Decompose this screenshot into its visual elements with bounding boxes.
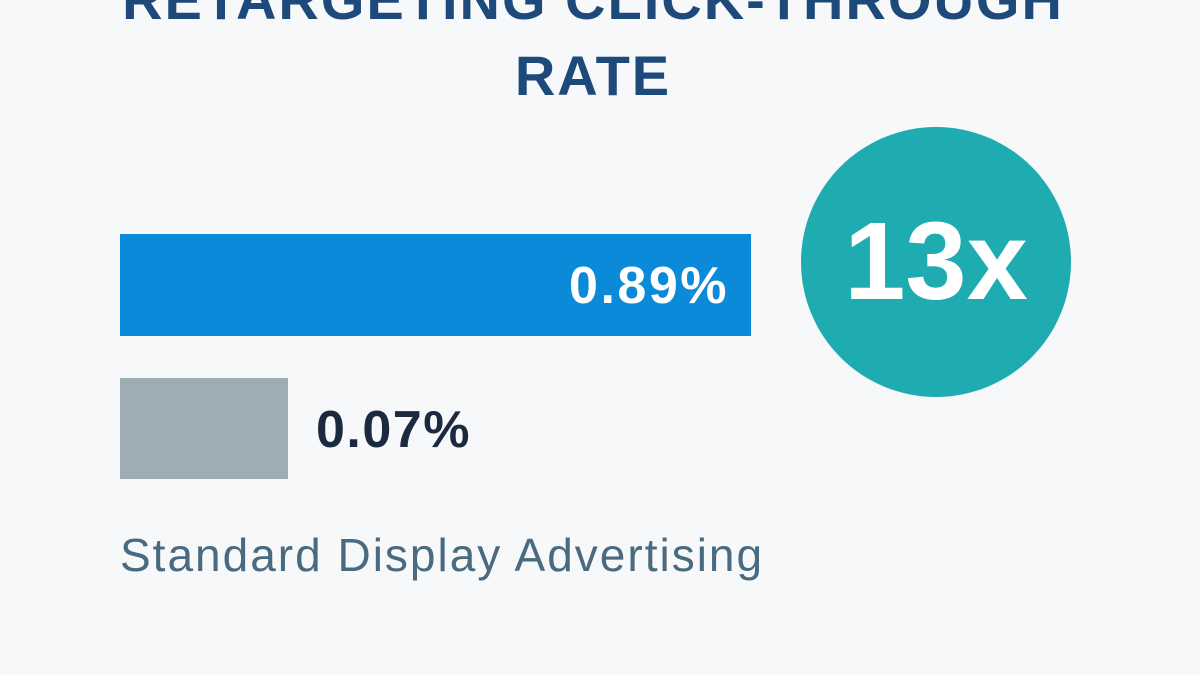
title: RATE [515, 44, 671, 107]
bar: retargeting 0.89% [120, 234, 751, 336]
bar label: 0.89%: 0.89% [569, 257, 729, 315]
circle: 13x [801, 127, 1071, 397]
bar: standard 0.07% [120, 378, 288, 479]
circle: 13x: 13x [844, 200, 1028, 323]
title [122, 0, 1064, 107]
label: 0.07%: 0.07% [316, 401, 471, 459]
caption: Standard Display Advertising [120, 529, 764, 581]
